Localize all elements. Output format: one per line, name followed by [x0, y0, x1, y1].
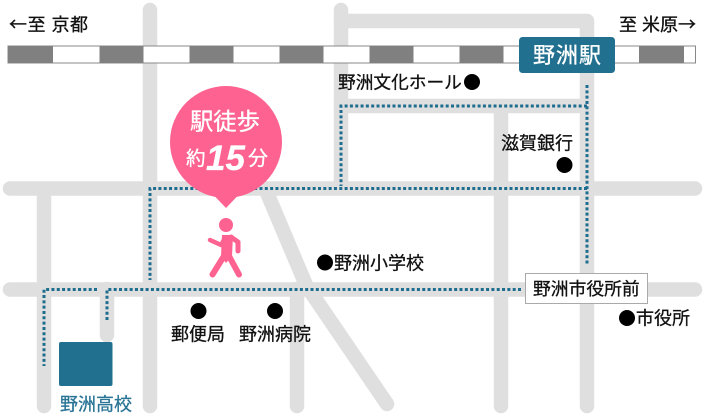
- walking time bubble: 分: [248, 147, 268, 170]
- walking time bubble: 15: [206, 139, 245, 178]
- destination: high school: 野洲高校: [60, 394, 132, 414]
- landmark: culture hall: 野洲文化ホール: [338, 72, 462, 92]
- landmark: hospital: [239, 303, 311, 344]
- bus stop label: 野洲市役所前: [533, 279, 640, 299]
- landmark: post office: [171, 303, 225, 344]
- railway line: [8, 46, 696, 63]
- bus stop label: [526, 274, 648, 304]
- landmark: hospital: 野洲病院: [239, 324, 311, 344]
- station badge: [519, 37, 615, 73]
- walking time bubble: 駅徒歩: [190, 108, 260, 134]
- walking time bubble: [170, 86, 282, 208]
- direction label: Maibara: 至 米原→: [619, 11, 696, 37]
- landmark: elementary school: 野洲小学校: [334, 254, 424, 274]
- station badge: 野洲駅: [533, 43, 601, 68]
- landmark: post office: 郵便局: [171, 324, 225, 344]
- icon: walking person: [210, 218, 239, 274]
- walking time bubble: 約: [186, 148, 206, 170]
- landmark: Shiga Bank: [501, 134, 573, 173]
- landmark: city hall: 市役所: [636, 308, 690, 328]
- walking route: [44, 85, 587, 366]
- landmark: Shiga Bank: 滋賀銀行: [501, 134, 573, 154]
- direction label: Kyoto: ←至 京都: [9, 11, 88, 37]
- destination: high school: [59, 342, 132, 414]
